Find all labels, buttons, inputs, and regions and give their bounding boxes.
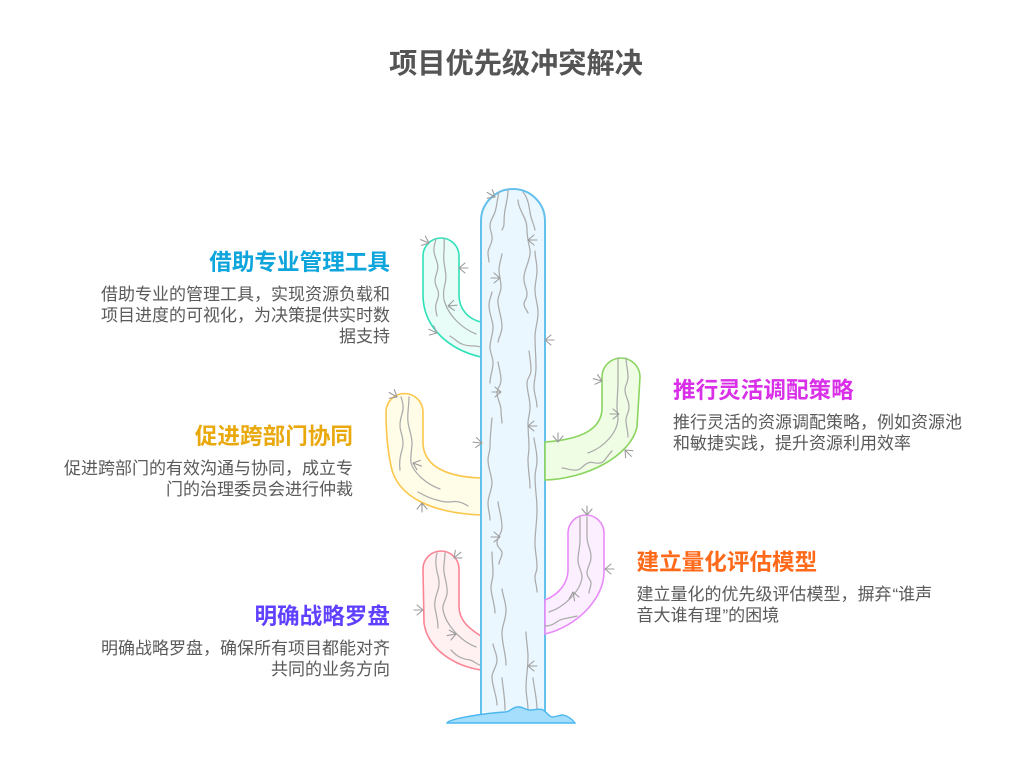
label: 促进跨部门协同 [64, 424, 353, 499]
description: 建立量化的优先级评估模型，摒弃“谁声 [636, 585, 932, 604]
description [64, 459, 353, 499]
description [101, 285, 390, 346]
description: 和敏捷实践，提升资源利用效率 [673, 434, 911, 453]
description: 门的治理委员会进行仲裁 [166, 480, 353, 499]
label: 明确战略罗盘 [101, 604, 390, 679]
description: 音大谁有理”的困境 [636, 606, 779, 625]
trunk arrows [473, 188, 554, 671]
teal arm shape [423, 238, 481, 357]
green arm arrows [553, 374, 635, 460]
arm: green, flexible allocation [545, 358, 640, 480]
arm: yellow, cross-department [386, 388, 481, 515]
yellow arm shape [386, 394, 481, 515]
heading: 明确战略罗盘 [254, 604, 390, 629]
green arm texture [562, 358, 629, 470]
label: 借助专业管理工具 [101, 250, 390, 346]
trunk [473, 188, 554, 714]
description [101, 639, 390, 679]
base mound [447, 707, 575, 723]
green arm shape [545, 358, 640, 480]
trunk shape [481, 189, 545, 712]
pink arm shape [423, 551, 481, 670]
heading: 推行灵活调配策略 [673, 378, 854, 403]
label: 建立量化评估模型 [636, 550, 932, 625]
trunk outline [481, 189, 545, 714]
arm: purple, quantified model [545, 506, 614, 634]
pink arm texture [435, 553, 480, 665]
purple arm shape [545, 515, 604, 634]
purple arm texture [545, 517, 591, 626]
arm: teal, professional tools [419, 235, 481, 357]
description: 共同的业务方向 [271, 660, 390, 679]
purple arm arrows [568, 506, 614, 602]
arm: pink, strategic compass [414, 548, 481, 670]
teal arm arrows [419, 235, 468, 338]
description: 推行灵活的资源调配策略，例如资源池 [673, 413, 962, 432]
description: 明确战略罗盘，确保所有项目都能对齐 [101, 639, 390, 658]
description [673, 413, 962, 453]
teal arm texture [434, 239, 481, 347]
label: 推行灵活调配策略 [673, 378, 962, 453]
yellow arm arrows [387, 388, 427, 512]
yellow arm texture [400, 397, 468, 506]
pink arm arrows [414, 548, 464, 640]
heading: 建立量化评估模型 [636, 550, 817, 575]
description: 促进跨部门的有效沟通与协同，成立专 [64, 459, 353, 478]
description [636, 585, 932, 625]
trunk texture [488, 190, 538, 710]
heading: 借助专业管理工具 [209, 250, 390, 275]
description: 借助专业的管理工具，实现资源负载和 [101, 285, 390, 304]
description: 项目进度的可视化，为决策提供实时数 [101, 306, 390, 325]
description: 据支持 [339, 327, 390, 346]
title: 项目优先级冲突解决 [389, 47, 643, 79]
heading: 促进跨部门协同 [195, 424, 353, 449]
